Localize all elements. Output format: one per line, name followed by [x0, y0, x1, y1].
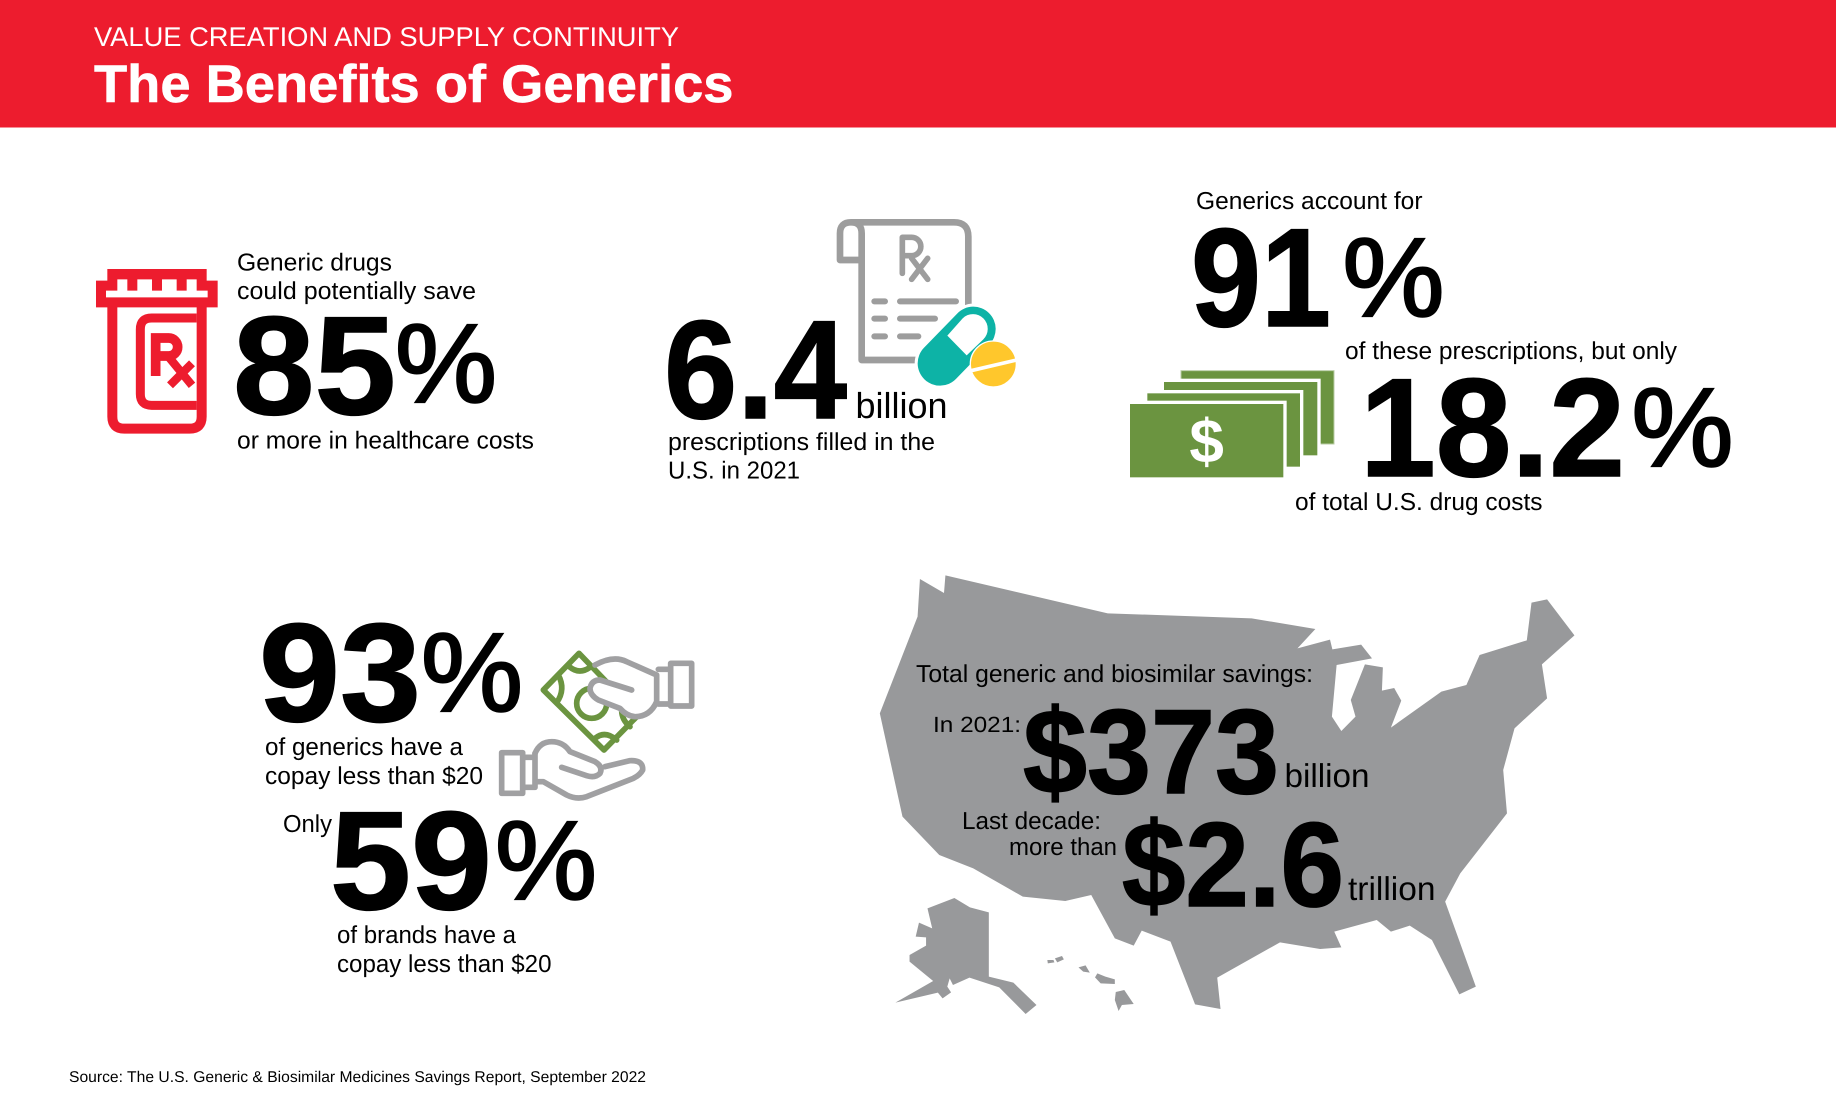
stat: 85: 85 — [233, 287, 396, 444]
text: copay less than $20: copay less than $20 — [337, 951, 552, 978]
stat: 18.2: 18.2 — [1360, 349, 1625, 506]
icon: red prescription bottle — [96, 269, 218, 429]
text: copay less than $20: copay less than $20 — [265, 763, 483, 790]
panel: 6.4 billion prescriptions — [664, 222, 1017, 484]
text: could potentially save: could potentially save — [237, 278, 476, 305]
text: prescriptions filled in the: prescriptions filled in the — [668, 429, 935, 456]
source note: Source: The U.S. Generic & Biosimilar Medicines Savings Report, September 2022 — [69, 1069, 646, 1086]
stat: percent sign: % — [495, 798, 597, 923]
text: total savings heading: Total generic and biosimilar savings: — [916, 661, 1313, 688]
header eyebrow: VALUE CREATION AND SUPPLY CONTINUITY — [94, 22, 679, 52]
text: U.S. in 2021: U.S. in 2021 — [668, 458, 800, 484]
text: last decade: Last decade: — [962, 808, 1101, 835]
icon: hands exchanging money — [502, 653, 692, 798]
stat: $373: $373 — [1023, 685, 1279, 819]
text: billion: billion — [856, 385, 948, 426]
stat: 91: 91 — [1191, 199, 1331, 356]
text: in 2021: In 2021: — [933, 712, 1021, 737]
text: of brands have a: of brands have a — [337, 922, 516, 949]
text: of total U.S. drug costs: of total U.S. drug costs — [1295, 489, 1542, 516]
text: of generics have a: of generics have a — [265, 734, 463, 761]
stat: $2.6: $2.6 — [1122, 798, 1344, 932]
text: generic drugs intro: Generic drugs — [237, 250, 392, 276]
panel: 91% and 18.2% — [1128, 188, 1734, 516]
panel: copay comparison — [259, 594, 692, 978]
stat: percent sign: % — [395, 301, 497, 426]
stat: 6.4: 6.4 — [664, 291, 847, 448]
stat: percent sign: % — [1632, 365, 1734, 490]
text: generics account for: Generics account for — [1196, 188, 1422, 215]
header banner — [0, 0, 1836, 128]
icon: prescription sheet with pills — [840, 222, 1017, 387]
text: or more in healthcare costs: or more in healthcare costs — [237, 428, 534, 454]
panel: US map savings — [880, 575, 1574, 1014]
stat: percent sign: % — [1342, 215, 1444, 340]
icon: stack of green bills — [1128, 371, 1334, 479]
map: United States silhouette — [880, 575, 1574, 1014]
text: of these prescriptions, but only: of these prescriptions, but only — [1345, 338, 1678, 365]
title: The Benefits of Generics — [94, 55, 734, 114]
text: trillion: trillion — [1348, 870, 1436, 907]
icon: stack of green bills: $ — [1189, 407, 1224, 476]
stat: percent sign: % — [421, 610, 523, 735]
stat: 93: 93 — [259, 594, 421, 751]
panel: 85% savings — [96, 250, 534, 454]
stat: 59: 59 — [330, 782, 492, 939]
text: more than: more than — [1009, 834, 1117, 861]
text: only: Only — [283, 811, 333, 838]
text: billion: billion — [1284, 757, 1370, 794]
